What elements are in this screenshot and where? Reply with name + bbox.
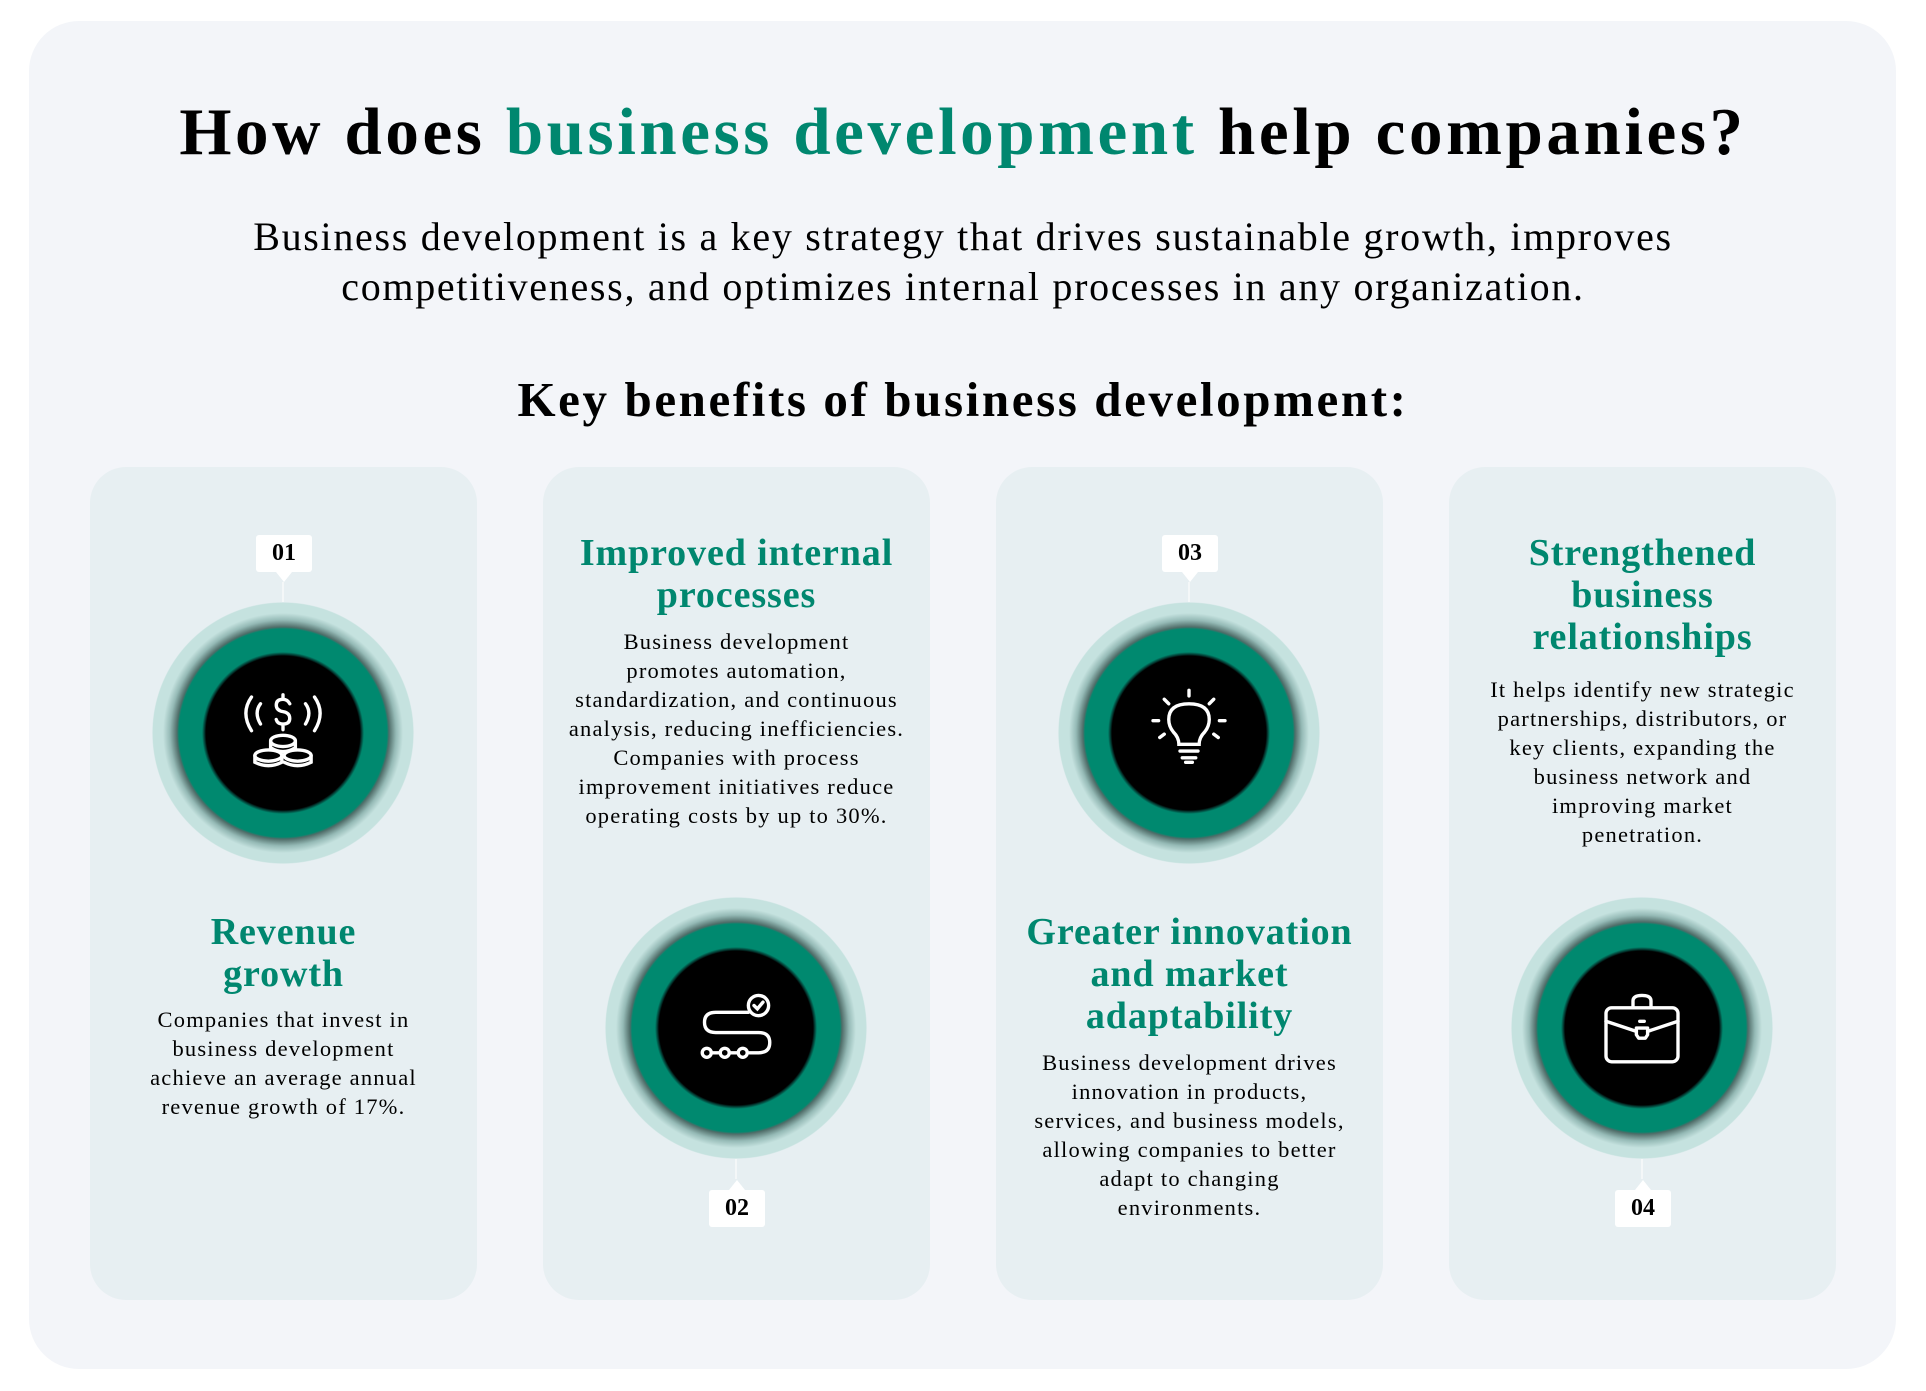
body text bbox=[150, 1007, 417, 1119]
body text: business network and bbox=[1534, 764, 1751, 789]
body text: It helps identify new strategic bbox=[1490, 677, 1795, 702]
body text: Companies that invest in bbox=[158, 1007, 409, 1032]
heading: relationships bbox=[1532, 616, 1753, 658]
subtitle: competitiveness, and optimizes internal processes in any organization. bbox=[341, 264, 1585, 309]
heading: and market bbox=[1091, 953, 1288, 995]
body text: promotes automation, bbox=[626, 658, 847, 683]
label 01 bbox=[256, 535, 312, 572]
heading: Improved internal bbox=[580, 532, 893, 574]
label 04: 04 bbox=[1631, 1195, 1655, 1221]
body text: adapt to changing bbox=[1099, 1166, 1280, 1191]
body text: services, and business models, bbox=[1034, 1108, 1345, 1133]
label 02 bbox=[709, 1190, 765, 1227]
heading: adaptability bbox=[1086, 995, 1293, 1037]
label 04 bbox=[1615, 1190, 1671, 1227]
body text: Companies with process bbox=[613, 745, 860, 770]
icon: briefcase bbox=[1511, 897, 1773, 1159]
heading: processes bbox=[657, 574, 816, 616]
panel: improved internal processes bbox=[543, 467, 930, 1300]
body text: operating costs by up to 30%. bbox=[585, 803, 888, 828]
body text: innovation in products, bbox=[1072, 1079, 1307, 1104]
body text: achieve an average annual bbox=[150, 1065, 417, 1090]
body text: analysis, reducing inefficiencies. bbox=[569, 716, 904, 741]
heading: Greater innovation bbox=[1026, 911, 1353, 953]
body text: allowing companies to better bbox=[1042, 1137, 1337, 1162]
label 03: 03 bbox=[1178, 540, 1202, 566]
heading: growth bbox=[223, 953, 344, 995]
section heading: Key benefits of business development: bbox=[517, 372, 1409, 427]
heading bbox=[211, 911, 356, 995]
label 01: 01 bbox=[272, 540, 296, 566]
body text bbox=[1034, 1050, 1345, 1220]
body text: Business development bbox=[624, 629, 849, 654]
panel: revenue growth bbox=[90, 467, 477, 1300]
body text: penetration. bbox=[1582, 822, 1703, 847]
body text: improving market bbox=[1552, 793, 1733, 818]
heading: Revenue bbox=[211, 911, 356, 953]
body text: revenue growth of 17%. bbox=[162, 1094, 405, 1119]
heading: business bbox=[1571, 574, 1714, 616]
heading bbox=[580, 532, 893, 616]
label 03 bbox=[1162, 535, 1218, 572]
body text: improvement initiatives reduce bbox=[579, 774, 894, 799]
body text: key clients, expanding the bbox=[1509, 735, 1776, 760]
panel: relationships bbox=[1449, 467, 1836, 1300]
icon: money coins bbox=[152, 602, 414, 864]
body text: environments. bbox=[1118, 1195, 1261, 1220]
heading bbox=[1529, 532, 1756, 658]
title: How does business development help companies? bbox=[179, 95, 1747, 169]
body text: partnerships, distributors, or bbox=[1498, 706, 1787, 731]
subtitle: Business development is a key strategy that drives sustainable growth, improves bbox=[253, 214, 1673, 259]
body text: standardization, and continuous bbox=[575, 687, 898, 712]
heading bbox=[1026, 911, 1353, 1037]
body text bbox=[1490, 677, 1795, 847]
body text: Business development drives bbox=[1042, 1050, 1337, 1075]
icon: process path bbox=[605, 897, 867, 1159]
label 02: 02 bbox=[725, 1195, 749, 1221]
body text: business development bbox=[172, 1036, 395, 1061]
panel: innovation bbox=[996, 467, 1383, 1300]
body text bbox=[569, 629, 904, 828]
subtitle bbox=[253, 214, 1673, 309]
heading: Strengthened bbox=[1529, 532, 1756, 574]
icon: light bulb bbox=[1058, 602, 1320, 864]
